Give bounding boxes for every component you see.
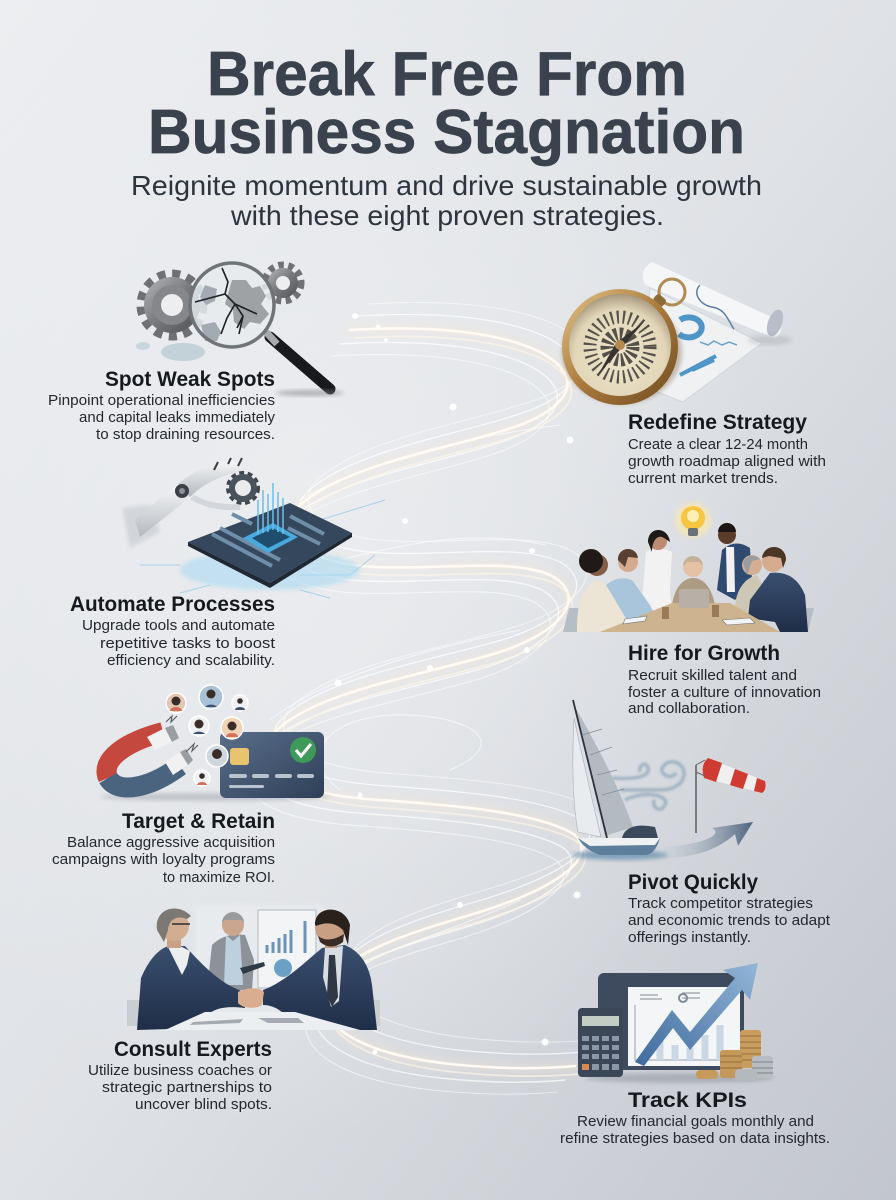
text: redefine strategy bbox=[628, 411, 826, 487]
text: pivot quickly: Track competitor strategies bbox=[628, 895, 813, 912]
icon: gears and magnifying glass bbox=[136, 263, 344, 396]
text: consult experts: Consult Experts bbox=[114, 1038, 272, 1061]
text: pivot quickly bbox=[628, 871, 831, 946]
text: spot weak spots: Pinpoint operational inefficiencies bbox=[48, 392, 275, 409]
text: track kpis bbox=[560, 1089, 830, 1147]
text: hire for growth: foster a culture of innovation bbox=[628, 684, 821, 701]
text: redefine strategy: current market trends. bbox=[628, 470, 778, 487]
text: hire for growth: Recruit skilled talent and bbox=[628, 667, 797, 684]
text: track kpis: Review financial goals monthly and bbox=[577, 1113, 814, 1130]
extra arcs bbox=[270, 425, 560, 1000]
title: Business Stagnation bbox=[148, 98, 745, 167]
subtitle: Reignite momentum and drive sustainable growth bbox=[131, 170, 762, 201]
icon: tablet chart, calculator and coins bbox=[578, 963, 775, 1083]
icon: robot arm and circuit board bbox=[122, 458, 385, 598]
text: redefine strategy: Create a clear 12-24 month bbox=[628, 436, 808, 453]
text: track kpis: refine strategies based on data insights. bbox=[560, 1130, 830, 1147]
text: track kpis: Track KPIs bbox=[628, 1089, 747, 1112]
icon: business handshake meeting bbox=[127, 905, 380, 1030]
icon: compass with roadmap documents bbox=[562, 262, 792, 405]
text: automate processes bbox=[70, 593, 276, 669]
text: automate processes: Upgrade tools and automate bbox=[82, 617, 275, 634]
title: Break Free From bbox=[207, 40, 687, 109]
flowing light path bbox=[248, 302, 600, 1094]
icon: team meeting with light bulb bbox=[563, 502, 814, 632]
text: spot weak spots: Spot Weak Spots bbox=[105, 368, 275, 391]
icon: magnet, avatars and credit card bbox=[100, 685, 330, 801]
icon: sailboat, wind and windsock bbox=[572, 700, 766, 860]
text: target and retain bbox=[52, 810, 275, 886]
text: consult experts: Utilize business coaches or bbox=[88, 1062, 272, 1079]
text: pivot quickly: Pivot Quickly bbox=[628, 871, 758, 894]
text: automate processes: efficiency and scalability. bbox=[107, 652, 275, 669]
text: spot weak spots: and capital leaks immediately bbox=[79, 409, 275, 426]
text: automate processes: Automate Processes bbox=[70, 593, 275, 616]
text: target and retain: Target & Retain bbox=[122, 810, 275, 833]
text: automate processes: repetitive tasks to boost bbox=[100, 635, 276, 652]
title bbox=[148, 40, 745, 167]
text: pivot quickly: and economic trends to adapt bbox=[628, 912, 831, 929]
text: redefine strategy: growth roadmap aligned with bbox=[628, 453, 826, 470]
flow light nodes bbox=[334, 313, 580, 1054]
text: pivot quickly: offerings instantly. bbox=[628, 929, 751, 946]
text: consult experts bbox=[88, 1038, 272, 1113]
subtitle bbox=[131, 170, 762, 231]
text: target and retain: to maximize ROI. bbox=[163, 869, 275, 886]
text: spot weak spots: to stop draining resources. bbox=[96, 426, 275, 443]
text: hire for growth bbox=[628, 642, 821, 717]
text: hire for growth: Hire for Growth bbox=[628, 642, 780, 665]
text: consult experts: strategic partnerships to bbox=[102, 1079, 272, 1096]
text: hire for growth: and collaboration. bbox=[628, 700, 750, 717]
text: target and retain: Balance aggressive acquisition bbox=[67, 834, 275, 851]
text: redefine strategy: Redefine Strategy bbox=[628, 411, 807, 434]
text: spot weak spots bbox=[48, 368, 275, 443]
subtitle: with these eight proven strategies. bbox=[230, 200, 664, 231]
text: target and retain: campaigns with loyalty programs bbox=[52, 851, 275, 868]
text: consult experts: uncover blind spots. bbox=[135, 1096, 272, 1113]
